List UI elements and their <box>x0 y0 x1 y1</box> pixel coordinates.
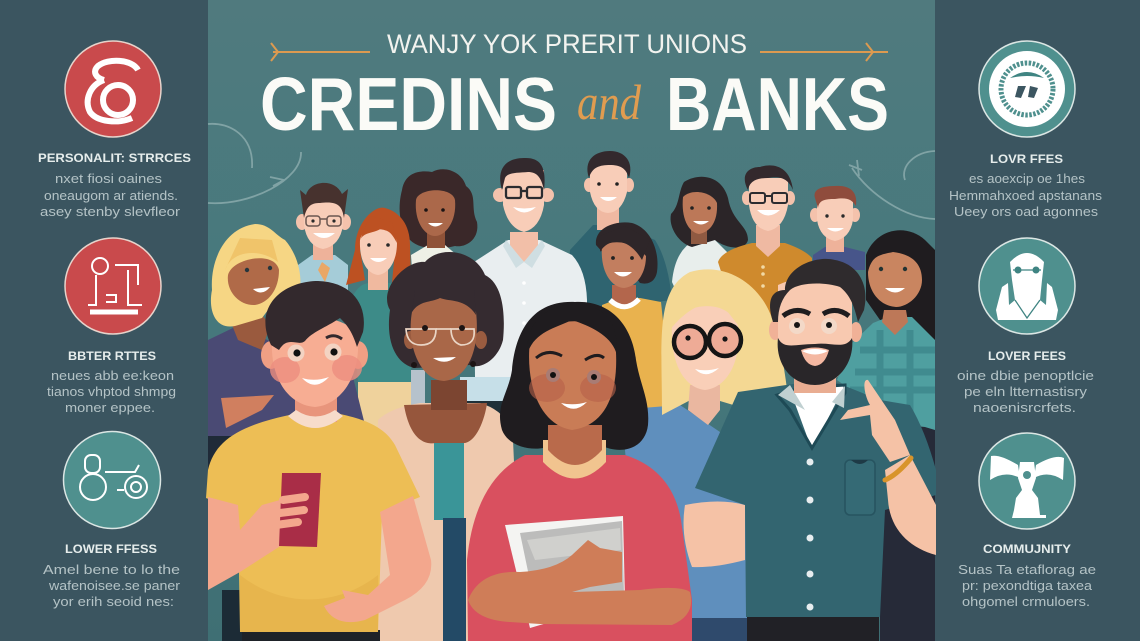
text: better rates <box>47 349 176 415</box>
text: lovr fees: Hemmahxoed apstanans <box>949 189 1102 203</box>
text: community <box>958 542 1096 609</box>
heading: and: and <box>577 74 642 130</box>
arrow: left <box>271 43 370 61</box>
icon: red cup <box>279 473 321 547</box>
text: personal services: oneaugom ar atiends. <box>44 189 178 203</box>
text: community: COMMUJNITY <box>983 542 1071 556</box>
text: lower fees: Amel bene to lo the <box>43 563 180 577</box>
person: woman in white top <box>671 177 748 300</box>
person: man in orange shirt <box>718 165 812 330</box>
text: lover fees <box>957 349 1094 415</box>
person: man in navy shirt <box>810 186 865 270</box>
text: lovr fees: Ueey ors oad agonnes <box>954 205 1098 219</box>
icon: seal <box>979 41 1075 137</box>
person: man with glasses left <box>296 183 351 290</box>
text: lower fees: yor erih seoid nes: <box>53 595 174 609</box>
text: lower fees: wafenoisee.se paner <box>48 579 180 593</box>
person: woman with curly hair <box>400 169 477 270</box>
person: blonde woman in purple <box>208 224 365 490</box>
icon: papers <box>505 516 625 628</box>
text: better rates: tianos vhptod shmpg <box>47 385 176 399</box>
text: lover fees: oine dbie penoptlcie <box>957 369 1094 383</box>
person: woman in red top with papers <box>467 302 692 641</box>
panel: center background <box>208 0 935 641</box>
heading: BANKS: BANKS <box>666 62 889 146</box>
text: lover fees: pe eln ltternastisry <box>964 385 1088 399</box>
icon: figure <box>979 238 1075 334</box>
panel: left sidebar <box>0 0 208 641</box>
text: lover fees: naoenisrcrfets. <box>973 401 1076 415</box>
person: red-haired woman <box>346 208 425 430</box>
text: personal services: asey stenby slevfleor <box>40 205 180 219</box>
text: personal services: PERSONALIT: STRRCES <box>38 151 191 165</box>
person: woman with afro and cardigan <box>378 252 522 641</box>
person: man in teal shirt <box>567 151 672 310</box>
person: man in yellow tee holding cup <box>206 281 431 641</box>
text: community: pr: pexondtiga taxea <box>962 579 1092 593</box>
text: lower fees <box>43 542 180 609</box>
text: lovr fees: es aoexcip oe 1hes <box>969 172 1085 186</box>
icon: red circle with machine <box>65 238 161 334</box>
person: bearded man pointing <box>684 259 936 641</box>
text: better rates: neues abb ee:keon <box>51 369 174 383</box>
text: better rates: moner eppee. <box>65 401 155 415</box>
panel text: right column <box>949 41 1102 609</box>
person: woman in plaid shirt <box>837 230 935 641</box>
person: woman in yellow top <box>596 222 665 425</box>
heading: CREDINS: CREDINS <box>260 62 557 146</box>
icon: red circle with ampersand <box>65 41 161 137</box>
text: lovr fees <box>949 152 1102 219</box>
icon: winged statue <box>979 433 1075 529</box>
text: better rates: BBTER RTTES <box>68 349 156 363</box>
text: community: ohgomel crmuloers. <box>962 595 1090 609</box>
text: personal services <box>38 151 191 219</box>
title block <box>260 29 889 146</box>
subtitle: WANJY YOK PRERIT UNIONS <box>387 29 747 59</box>
panel text: left column <box>38 41 191 609</box>
arrow: right <box>760 43 888 61</box>
person: man in white shirt <box>460 158 590 431</box>
icon: teal circle with cycle <box>64 432 160 528</box>
panel: right sidebar <box>935 0 1140 641</box>
decorative swirl left <box>208 124 301 203</box>
decorative swirl right <box>849 151 935 219</box>
text: lovr fees: LOVR FFES <box>990 152 1063 166</box>
text: lower fees: LOWER FFESS <box>65 542 157 556</box>
person: blonde woman with round glasses <box>625 269 790 641</box>
text: community: Suas Ta etaflorag ae <box>958 563 1096 577</box>
text: lover fees: LOVER FEES <box>988 349 1066 363</box>
text: personal services: nxet fiosi oaines <box>55 172 162 186</box>
